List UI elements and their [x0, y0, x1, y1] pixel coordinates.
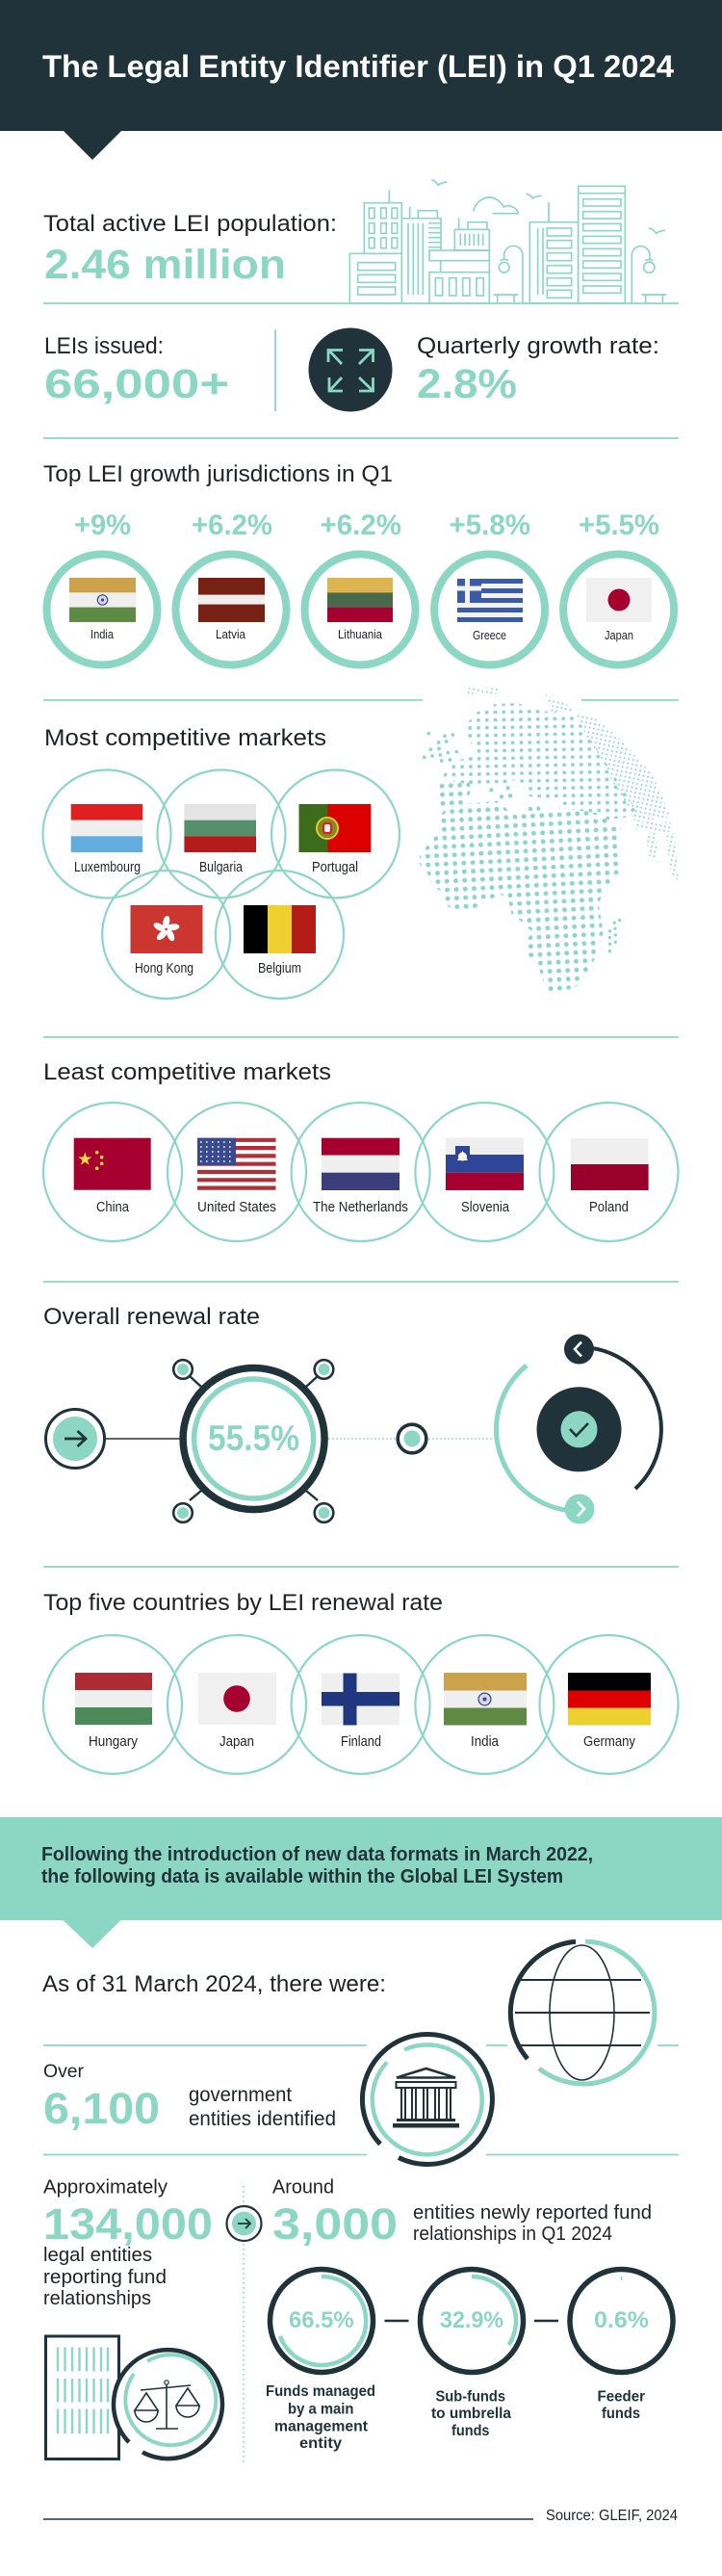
flag: Bulgaria: Bulgaria — [199, 859, 244, 875]
panel: most competitive markets — [42, 770, 400, 999]
icon: city skyline — [349, 180, 666, 303]
source: Source: GLEIF, 2024 — [546, 2508, 678, 2524]
panel: least competitive markets — [43, 1103, 678, 1241]
heading: least competitive markets: Least competitive markets — [43, 1059, 331, 1085]
flag: Hong Kong — [131, 905, 202, 976]
divider with arrow — [227, 2186, 262, 2462]
flag: China — [74, 1138, 151, 1215]
chart: 0.6%: 0.6% — [594, 2307, 649, 2333]
flag: Portugal — [299, 804, 371, 875]
chart: 66.5%: 66.5% — [289, 2307, 354, 2333]
growth: India: India — [90, 627, 115, 641]
flag: Germany: Germany — [583, 1733, 635, 1750]
chart: 66.5% — [266, 2269, 375, 2452]
chart: 66.5%: management — [274, 2419, 369, 2434]
chart: 32.9%: to umbrella — [431, 2406, 511, 2422]
growth: Latvia — [175, 509, 287, 664]
banner: new data formats — [0, 1817, 722, 1948]
stat: LEIs issued: LEIs issued: — [44, 333, 164, 359]
flag: Japan: Japan — [219, 1733, 254, 1750]
dotted globe map — [419, 688, 679, 992]
flag: Luxembourg: Luxembourg — [74, 859, 141, 875]
heading: as of 31 March: As of 31 March 2024, there were: — [42, 1971, 386, 1997]
heading: most competitive markets: Most competitive markets — [44, 725, 326, 751]
flag: Hong Kong: Hong Kong — [135, 960, 193, 976]
stat: newly reported fund relationships: relationships in Q1 2024 — [413, 2224, 612, 2245]
stat: newly reported fund relationships: entities newly reported fund — [413, 2202, 652, 2224]
stat: legal entities reporting fund relationships — [43, 2176, 213, 2309]
big ring: 55.5% — [173, 1360, 333, 1522]
growth: Latvia: Latvia — [216, 627, 246, 641]
stat: LEIs issued — [44, 333, 229, 407]
flag: India — [444, 1673, 527, 1750]
flag: The Netherlands: The Netherlands — [313, 1199, 408, 1215]
chart: 0.6%: Feeder — [597, 2388, 645, 2406]
header banner — [0, 0, 722, 160]
chart: 66.5%: by a main — [288, 2402, 354, 2417]
heading: top five countries: Top five countries by LEI renewal rate — [43, 1590, 443, 1616]
big ring: 55.5%: 55.5% — [208, 1418, 299, 1458]
flag: Japan — [198, 1673, 276, 1750]
growth: Lithuania: Lithuania — [338, 627, 383, 641]
stat: government entities: 6,100 — [43, 2084, 160, 2133]
stat: legal entities reporting fund relationships: legal entities — [43, 2245, 152, 2266]
flag: Finland: Finland — [341, 1733, 381, 1750]
growth: Japan — [563, 509, 674, 664]
stat: newly reported fund relationships — [272, 2176, 652, 2249]
flag: China: China — [96, 1199, 130, 1215]
banner: new data formats: Following the introduction of new data formats in March 2022, — [41, 1844, 593, 1865]
flag: Hungary: Hungary — [89, 1733, 138, 1750]
stat: government entities: government — [189, 2084, 292, 2106]
growth: Lithuania — [304, 509, 416, 664]
chart: 0.6%: funds — [602, 2406, 640, 2422]
growth: Greece: +5.8% — [449, 509, 530, 541]
stat: government entities — [43, 2062, 336, 2133]
growth: Greece: Greece — [473, 628, 506, 642]
stat: legal entities reporting fund relationships: 134,000 — [43, 2199, 213, 2249]
stat: government entities: entities identified — [189, 2108, 336, 2130]
flag: United States — [197, 1138, 276, 1215]
stat: government entities: Over — [43, 2062, 85, 2082]
banner: new data formats: the following data is available within the Global LEI System — [41, 1866, 563, 1887]
growth: Lithuania: +6.2% — [320, 509, 401, 541]
flag: Portugal: Portugal — [312, 859, 358, 875]
heading: overall renewal rate: Overall renewal rate — [43, 1304, 260, 1330]
flag: The Netherlands — [313, 1138, 408, 1215]
stat: newly reported fund relationships: Around — [272, 2176, 334, 2198]
stat: legal entities reporting fund relationships: Approximately — [43, 2176, 168, 2198]
icon: globe — [510, 1941, 655, 2084]
panel: top five by renewal rate — [43, 1635, 678, 1774]
chart: 32.9%: funds — [451, 2423, 490, 2439]
flag: Finland — [322, 1674, 400, 1750]
stat: legal entities reporting fund relationships: relationships — [43, 2288, 151, 2309]
stat: LEIs issued: 66,000+ — [44, 361, 229, 407]
growth: India: +9% — [74, 509, 131, 541]
growth: Japan: Japan — [605, 628, 633, 642]
flag: Germany — [568, 1673, 651, 1750]
flag: Luxembourg — [71, 804, 142, 875]
chart: 0.6% — [570, 2269, 673, 2422]
stat: total active LEI population: Total active LEI population: — [43, 211, 337, 237]
panel: growth jurisdictions — [46, 509, 674, 664]
chart: 32.9%: Sub-funds — [435, 2388, 505, 2406]
flag: Poland — [571, 1138, 649, 1215]
flag: Bulgaria — [184, 804, 256, 875]
growth: Japan: +5.5% — [579, 509, 659, 541]
title: The Legal Entity Identifier (LEI) in Q1 2024 — [42, 49, 674, 84]
flag: Belgium: Belgium — [258, 960, 301, 976]
icon: scales of justice — [46, 2336, 222, 2459]
flag: United States: United States — [197, 1199, 276, 1215]
node — [398, 1424, 426, 1453]
stat: quarterly growth rate — [417, 333, 659, 407]
growth: India — [46, 509, 158, 664]
chart: 32.9% — [420, 2269, 524, 2439]
icon: government building — [362, 2034, 492, 2164]
chart: 66.5%: Funds managed — [266, 2383, 375, 2400]
icon: check with cycle arrows — [497, 1335, 661, 1523]
heading: top growth jurisdictions: Top LEI growth jurisdictions in Q1 — [43, 461, 393, 487]
flag: India: India — [471, 1733, 500, 1750]
stat: total active LEI population: 2.46 million — [44, 242, 286, 288]
icon: growth arrows — [308, 327, 393, 412]
flag: Belgium — [244, 905, 316, 976]
growth: Latvia: +6.2% — [192, 509, 272, 541]
stat: newly reported fund relationships: 3,000 — [272, 2199, 398, 2249]
chart: renewal rate diagram — [46, 1335, 661, 1523]
stat: total active LEI population — [43, 211, 337, 288]
chart: 66.5%: entity — [299, 2435, 342, 2452]
flag: Hungary — [75, 1673, 152, 1750]
stat: legal entities reporting fund relationships: reporting fund — [43, 2267, 167, 2288]
flag: Slovenia: Slovenia — [461, 1199, 510, 1215]
growth: Greece — [434, 509, 545, 664]
chart: 32.9%: 32.9% — [440, 2307, 503, 2333]
icon: arrow circle — [46, 1410, 104, 1468]
stat: quarterly growth rate: 2.8% — [417, 361, 517, 407]
stat: quarterly growth rate: Quarterly growth rate: — [417, 333, 659, 359]
flag: Slovenia — [446, 1138, 524, 1215]
flag: Poland: Poland — [589, 1199, 629, 1215]
